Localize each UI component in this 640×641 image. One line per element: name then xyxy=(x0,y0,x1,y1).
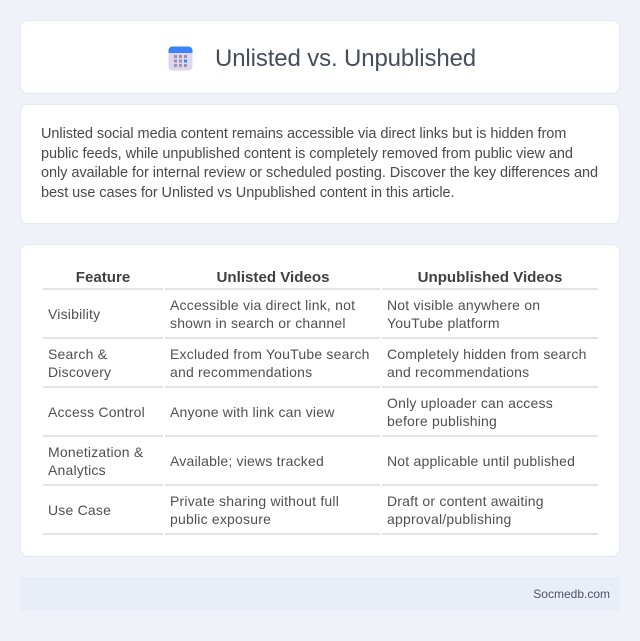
footer credit: Socmedb.com xyxy=(533,587,610,601)
row: Monetization and Analytics: Analytics xyxy=(48,462,106,478)
intro text: Unlisted social media content remains accessible via direct links but is hidden from xyxy=(41,126,566,142)
row: Monetization and Analytics: Not applicable until published xyxy=(387,453,575,469)
row: Use Case: public exposure xyxy=(170,511,271,527)
intro panel xyxy=(20,104,620,224)
row: Search and Discovery: and recommendations xyxy=(387,364,529,380)
row: Visibility: Accessible via direct link, not xyxy=(170,297,355,313)
row: Use Case: Private sharing without full xyxy=(170,493,339,509)
row: Monetization and Analytics: Monetization & xyxy=(48,444,143,460)
row: Access Control: Access Control xyxy=(48,404,145,420)
row: Search and Discovery: Discovery xyxy=(48,364,111,380)
intro text: best use cases for Unlisted vs Unpublished content in this article. xyxy=(41,185,454,201)
row: Monetization and Analytics xyxy=(43,444,598,486)
row: Search and Discovery: Completely hidden from search xyxy=(387,346,587,362)
row: Access Control xyxy=(43,395,598,437)
table header: Feature xyxy=(76,269,130,286)
row: Visibility: Visibility xyxy=(48,306,100,322)
intro text xyxy=(41,126,598,201)
row: Use Case xyxy=(43,493,598,535)
row: Search and Discovery xyxy=(43,346,598,388)
table panel xyxy=(20,244,620,557)
row: Visibility: Not visible anywhere on xyxy=(387,297,540,313)
row: Use Case: approval/publishing xyxy=(387,511,511,527)
row: Access Control: Anyone with link can view xyxy=(170,404,335,420)
icon: calendar xyxy=(168,46,192,70)
title panel xyxy=(20,20,620,94)
row: Visibility: YouTube platform xyxy=(387,315,500,331)
table header: Unpublished Videos xyxy=(418,269,562,286)
table header: Unlisted Videos xyxy=(217,269,329,286)
row: Search and Discovery: Search & xyxy=(48,346,107,362)
table header xyxy=(43,269,598,290)
row: Search and Discovery: and recommendations xyxy=(170,364,312,380)
row: Use Case: Draft or content awaiting xyxy=(387,493,544,509)
title: Unlisted vs. Unpublished xyxy=(215,45,476,72)
footer bar xyxy=(20,577,620,611)
row: Visibility xyxy=(43,297,598,339)
comparison table xyxy=(43,269,598,535)
row: Visibility: shown in search or channel xyxy=(170,315,346,331)
row: Monetization and Analytics: Available; views tracked xyxy=(170,453,324,469)
row: Use Case: Use Case xyxy=(48,502,111,518)
intro text: public feeds, while unpublished content is completely removed from public view and xyxy=(41,146,573,162)
row: Access Control: Only uploader can access xyxy=(387,395,553,411)
row: Access Control: before publishing xyxy=(387,413,497,429)
intro text: only available for internal review or scheduled posting. Discover the key differences and xyxy=(41,165,598,181)
row: Search and Discovery: Excluded from YouTube search xyxy=(170,346,370,362)
